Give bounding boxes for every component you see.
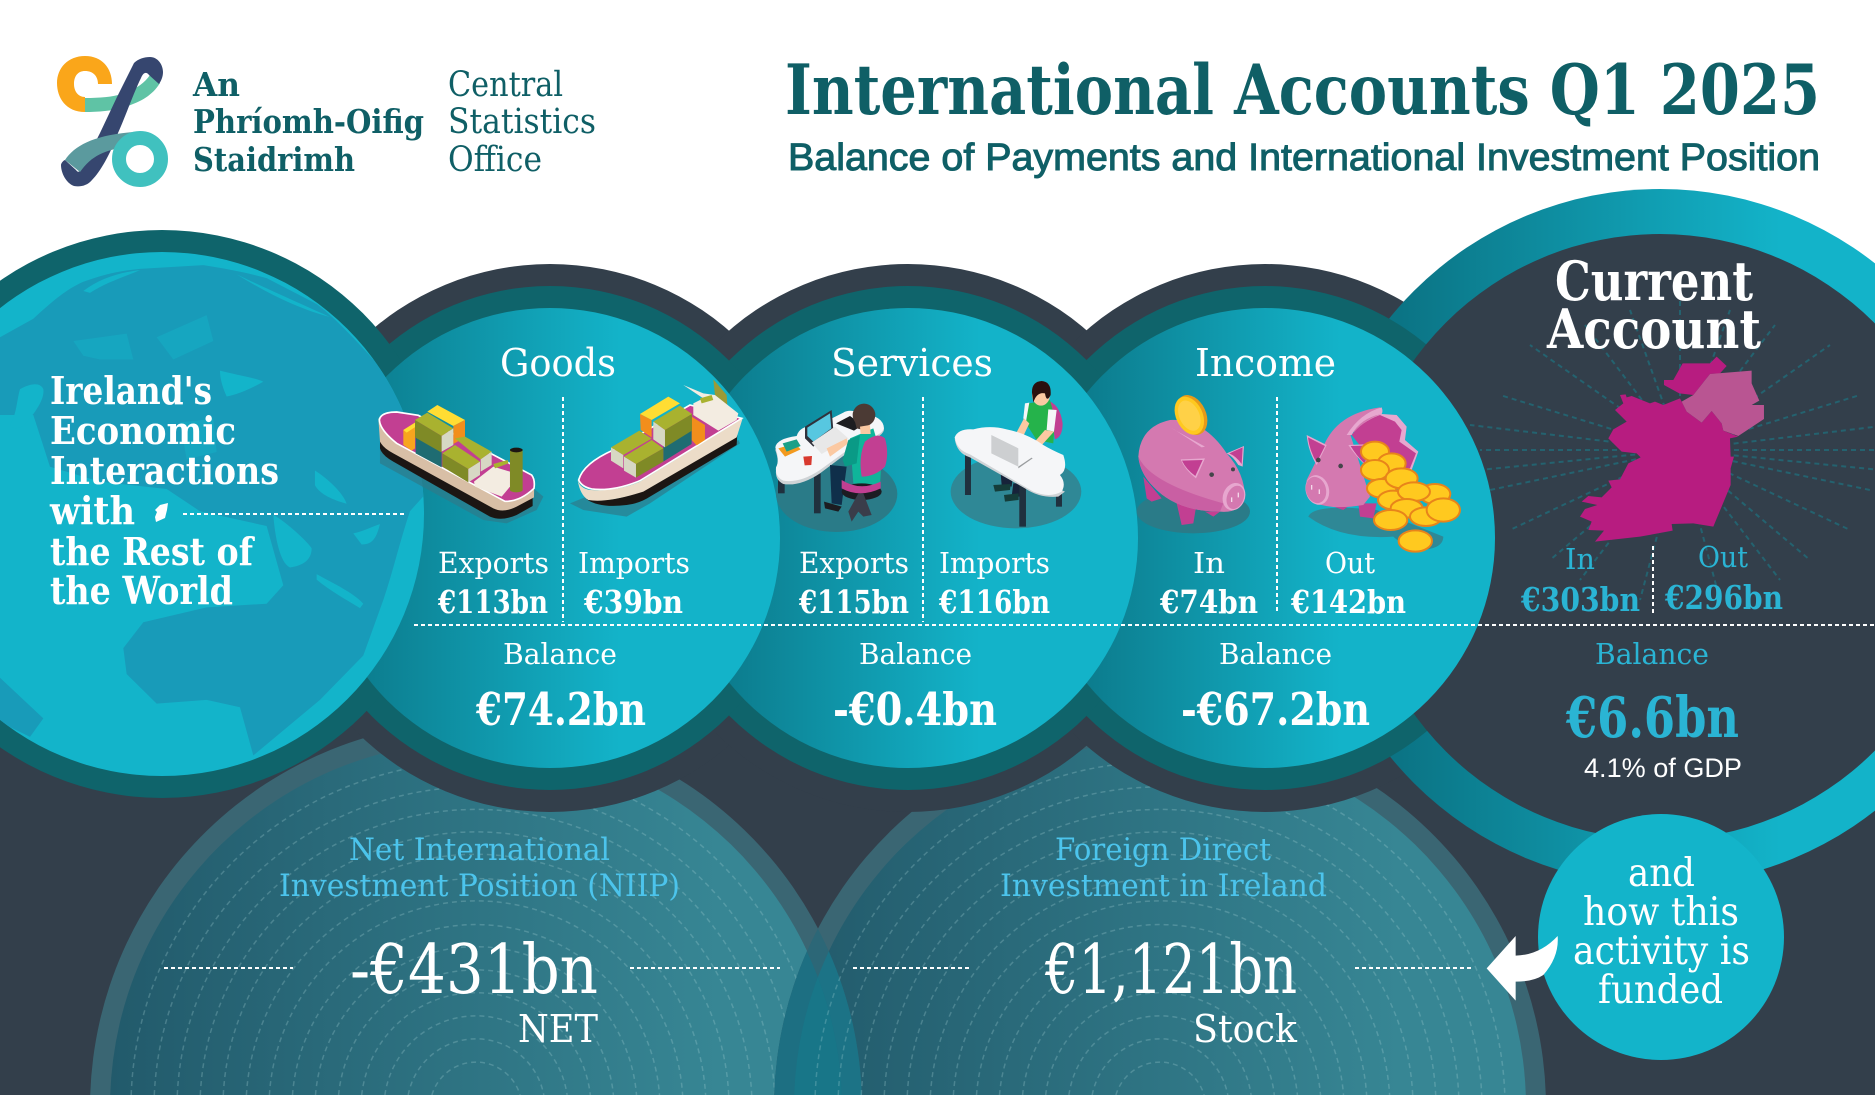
income figures: €74bn bbox=[1159, 583, 1258, 621]
logo text Irish bbox=[192, 65, 424, 179]
current account divider bbox=[1652, 546, 1654, 616]
current account figures: €303bn bbox=[1520, 580, 1640, 619]
income divider bbox=[1276, 397, 1278, 612]
current account figures: Balance bbox=[1595, 637, 1709, 671]
goods divider bbox=[562, 397, 564, 622]
FDI text: Investment in Ireland bbox=[1000, 868, 1327, 904]
panel: NIIP dome bbox=[90, 721, 862, 1095]
callout: how this activity is funded: how this bbox=[1583, 890, 1739, 935]
horizontal balance divider bbox=[414, 624, 1875, 626]
services figures: €115bn bbox=[798, 583, 909, 621]
heading: Ireland's economic interactions: Interactions bbox=[50, 448, 279, 493]
heading: Current Account bbox=[1546, 249, 1761, 361]
goods figures: Imports bbox=[578, 546, 690, 580]
goods figures bbox=[437, 546, 690, 736]
panel: globe bbox=[0, 252, 430, 776]
NIIP text: Investment Position (NIIP) bbox=[279, 868, 680, 904]
logo bbox=[57, 56, 596, 186]
panel: income disc bbox=[1035, 308, 1495, 768]
FDI text: €1,121bn bbox=[1044, 931, 1297, 1010]
dark outer rings of the three circles bbox=[276, 264, 1539, 812]
logo text English: Central bbox=[448, 65, 563, 105]
panel: goods disc bbox=[320, 308, 780, 768]
callout: how this activity is funded: funded bbox=[1598, 968, 1723, 1013]
icon: broken piggy bank with coins bbox=[1302, 407, 1460, 552]
heading: Ireland's economic interactions: Economic bbox=[50, 408, 236, 453]
panel: FDI dome bbox=[774, 721, 1546, 1095]
icon: cloud desk with worker bbox=[951, 381, 1081, 528]
subtitle: Balance of Payments and International Investment Position bbox=[788, 137, 1820, 179]
services figures: Exports bbox=[799, 546, 909, 580]
goods figures: Balance bbox=[503, 637, 617, 671]
logo text English: Office bbox=[448, 140, 542, 180]
heading: Ireland's economic interactions: Ireland's bbox=[50, 368, 212, 413]
income figures: Balance bbox=[1219, 637, 1332, 671]
NIIP text: NET bbox=[518, 1007, 598, 1051]
income figures: -€67.2bn bbox=[1181, 683, 1370, 736]
services divider bbox=[922, 397, 924, 622]
heading: Current Account: Account bbox=[1546, 297, 1761, 361]
services figures: Balance bbox=[859, 637, 972, 671]
heading: Current Account: Current bbox=[1555, 249, 1753, 313]
logo text Irish: Phríomh-Oifig bbox=[193, 102, 424, 141]
heading: Income: Income bbox=[1195, 341, 1336, 385]
FDI text: Foreign Direct bbox=[1055, 832, 1272, 868]
current account figures: In bbox=[1565, 542, 1595, 576]
panel: services disc bbox=[678, 308, 1138, 768]
FDI text bbox=[1000, 832, 1327, 1051]
current account figures bbox=[1520, 540, 1783, 783]
icon: small Ireland bbox=[155, 503, 168, 522]
icon: map of Ireland bbox=[1580, 357, 1764, 542]
NIIP text: Net International bbox=[349, 832, 610, 868]
icon: piggy bank with falling coin bbox=[1137, 390, 1250, 533]
NIIP text: -€431bn bbox=[350, 931, 598, 1010]
callout: how this activity is funded bbox=[1538, 814, 1784, 1060]
heading: Ireland's economic interactions: with bbox=[49, 488, 135, 533]
FDI text: Stock bbox=[1193, 1007, 1298, 1051]
current account figures: €6.6bn bbox=[1565, 685, 1739, 751]
heading: Ireland's economic interactions: the World bbox=[50, 568, 233, 613]
income figures: €142bn bbox=[1290, 583, 1406, 621]
callout: how this activity is funded: activity is bbox=[1573, 929, 1750, 974]
current account figures: Out bbox=[1698, 540, 1748, 574]
current account figures: 4.1% of GDP bbox=[1584, 753, 1742, 783]
services figures: €116bn bbox=[938, 583, 1050, 621]
teal rings of globe and circles bbox=[0, 230, 1517, 798]
FDI dotted lines bbox=[853, 967, 1471, 969]
income figures bbox=[1159, 546, 1406, 736]
icon: import ship bbox=[570, 379, 743, 517]
dark background bbox=[0, 538, 1875, 1095]
logo text Irish: Staidrimh bbox=[193, 140, 355, 179]
goods figures: Exports bbox=[438, 546, 549, 580]
globe connector dotted line bbox=[183, 513, 404, 515]
logo text English: Statistics bbox=[448, 102, 596, 142]
logo text English bbox=[448, 65, 596, 180]
income figures: In bbox=[1193, 546, 1225, 580]
current account outer ring bbox=[1312, 189, 1875, 885]
panel: current account disc bbox=[1357, 234, 1875, 840]
icon: desk with bearded worker bbox=[775, 404, 897, 532]
services figures: -€0.4bn bbox=[833, 683, 997, 736]
arrow bbox=[1487, 936, 1558, 1001]
logo mark bbox=[57, 56, 163, 186]
goods figures: €74.2bn bbox=[475, 683, 646, 736]
services figures bbox=[798, 546, 1050, 736]
heading: Ireland's economic interactions: the Rest of bbox=[50, 529, 255, 574]
services figures: Imports bbox=[939, 546, 1050, 580]
callout: how this activity is funded: and bbox=[1628, 851, 1695, 896]
heading: Goods: Goods bbox=[500, 341, 616, 385]
NIIP text bbox=[279, 832, 680, 1051]
NIIP dotted lines bbox=[164, 967, 780, 969]
icon: export ship bbox=[378, 405, 543, 523]
goods figures: €39bn bbox=[583, 583, 683, 621]
income figures: Out bbox=[1325, 546, 1375, 580]
goods figures: €113bn bbox=[437, 583, 548, 621]
heading: Ireland's economic interactions bbox=[49, 368, 279, 613]
logo text Irish: An bbox=[192, 65, 240, 104]
heading: Services: Services bbox=[831, 341, 993, 385]
current account figures: €296bn bbox=[1664, 578, 1783, 617]
